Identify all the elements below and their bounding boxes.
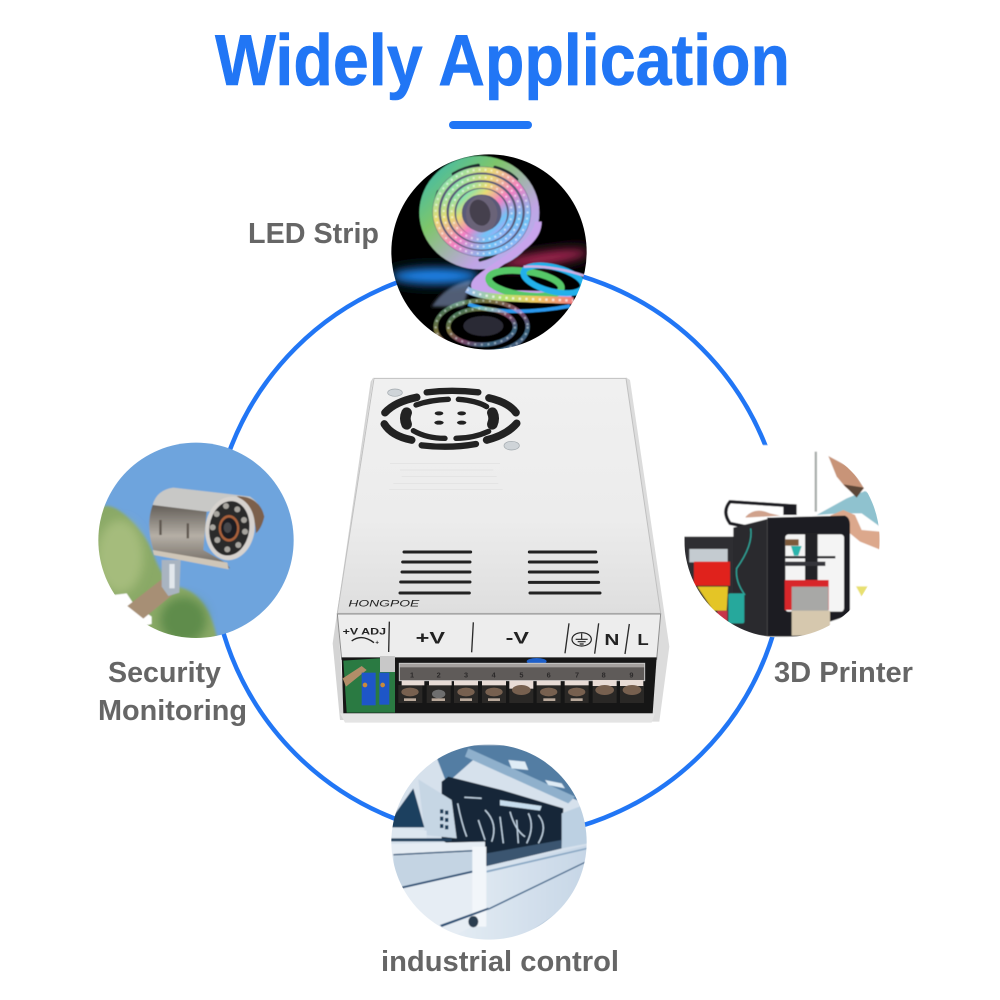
cover numbers [410,670,633,679]
fan hub holes [434,411,466,425]
terminal legends: + [375,641,379,647]
brand: HONGPOE [348,599,421,609]
side rails [626,377,669,722]
cover numbers: 6 [547,670,551,679]
icon: LED strip photo [391,154,587,350]
ring connecting the applications [212,264,786,838]
terminal legends: N [604,632,619,649]
cover numbers: 2 [437,670,441,679]
panel dividers [389,622,629,654]
title underline bar [449,121,532,129]
icon: 3D printer photo [680,445,890,645]
cover numbers: 4 [492,670,497,679]
infographic [98,32,912,972]
label: Security Monitoring: Security [108,657,221,689]
cover numbers: 1 [410,670,414,679]
icon: security camera photo [98,442,294,638]
label: LED Strip: LED Strip [248,218,379,250]
terminal legends: L [637,632,649,649]
terminal legends: +V ADJ [343,627,386,637]
terminal blocks [398,685,644,703]
title: Widely Application [215,21,790,101]
terminal housing [342,657,657,713]
label: Security Monitoring [98,657,247,727]
label: Security Monitoring: Monitoring [98,695,247,727]
adj arrow [352,638,374,643]
front panel [337,614,661,659]
blue capacitor [527,658,547,665]
label: industrial control: industrial control [381,946,619,978]
fan grille [384,391,517,447]
terminal legends: -V [506,628,529,647]
label: 3D Printer: 3D Printer [774,657,913,689]
terminal legends [343,627,649,649]
cover numbers: 7 [575,670,579,679]
terminal screws [401,680,643,701]
power supply unit [333,377,669,723]
icon: industrial machine photo [391,744,587,940]
pcb [343,657,395,713]
cover numbers: 8 [602,670,606,679]
bottom rail [340,713,655,723]
trim pots [362,673,389,705]
earth symbol [572,633,591,646]
cover numbers: 9 [629,670,633,679]
cover numbers: 5 [519,670,523,679]
terminal legends: +V [416,628,445,647]
cover numbers: 3 [464,670,468,679]
screws [388,389,519,450]
vent slots [400,552,600,593]
barrier cover [399,663,645,681]
spec label [389,463,503,489]
top lid [337,378,661,613]
